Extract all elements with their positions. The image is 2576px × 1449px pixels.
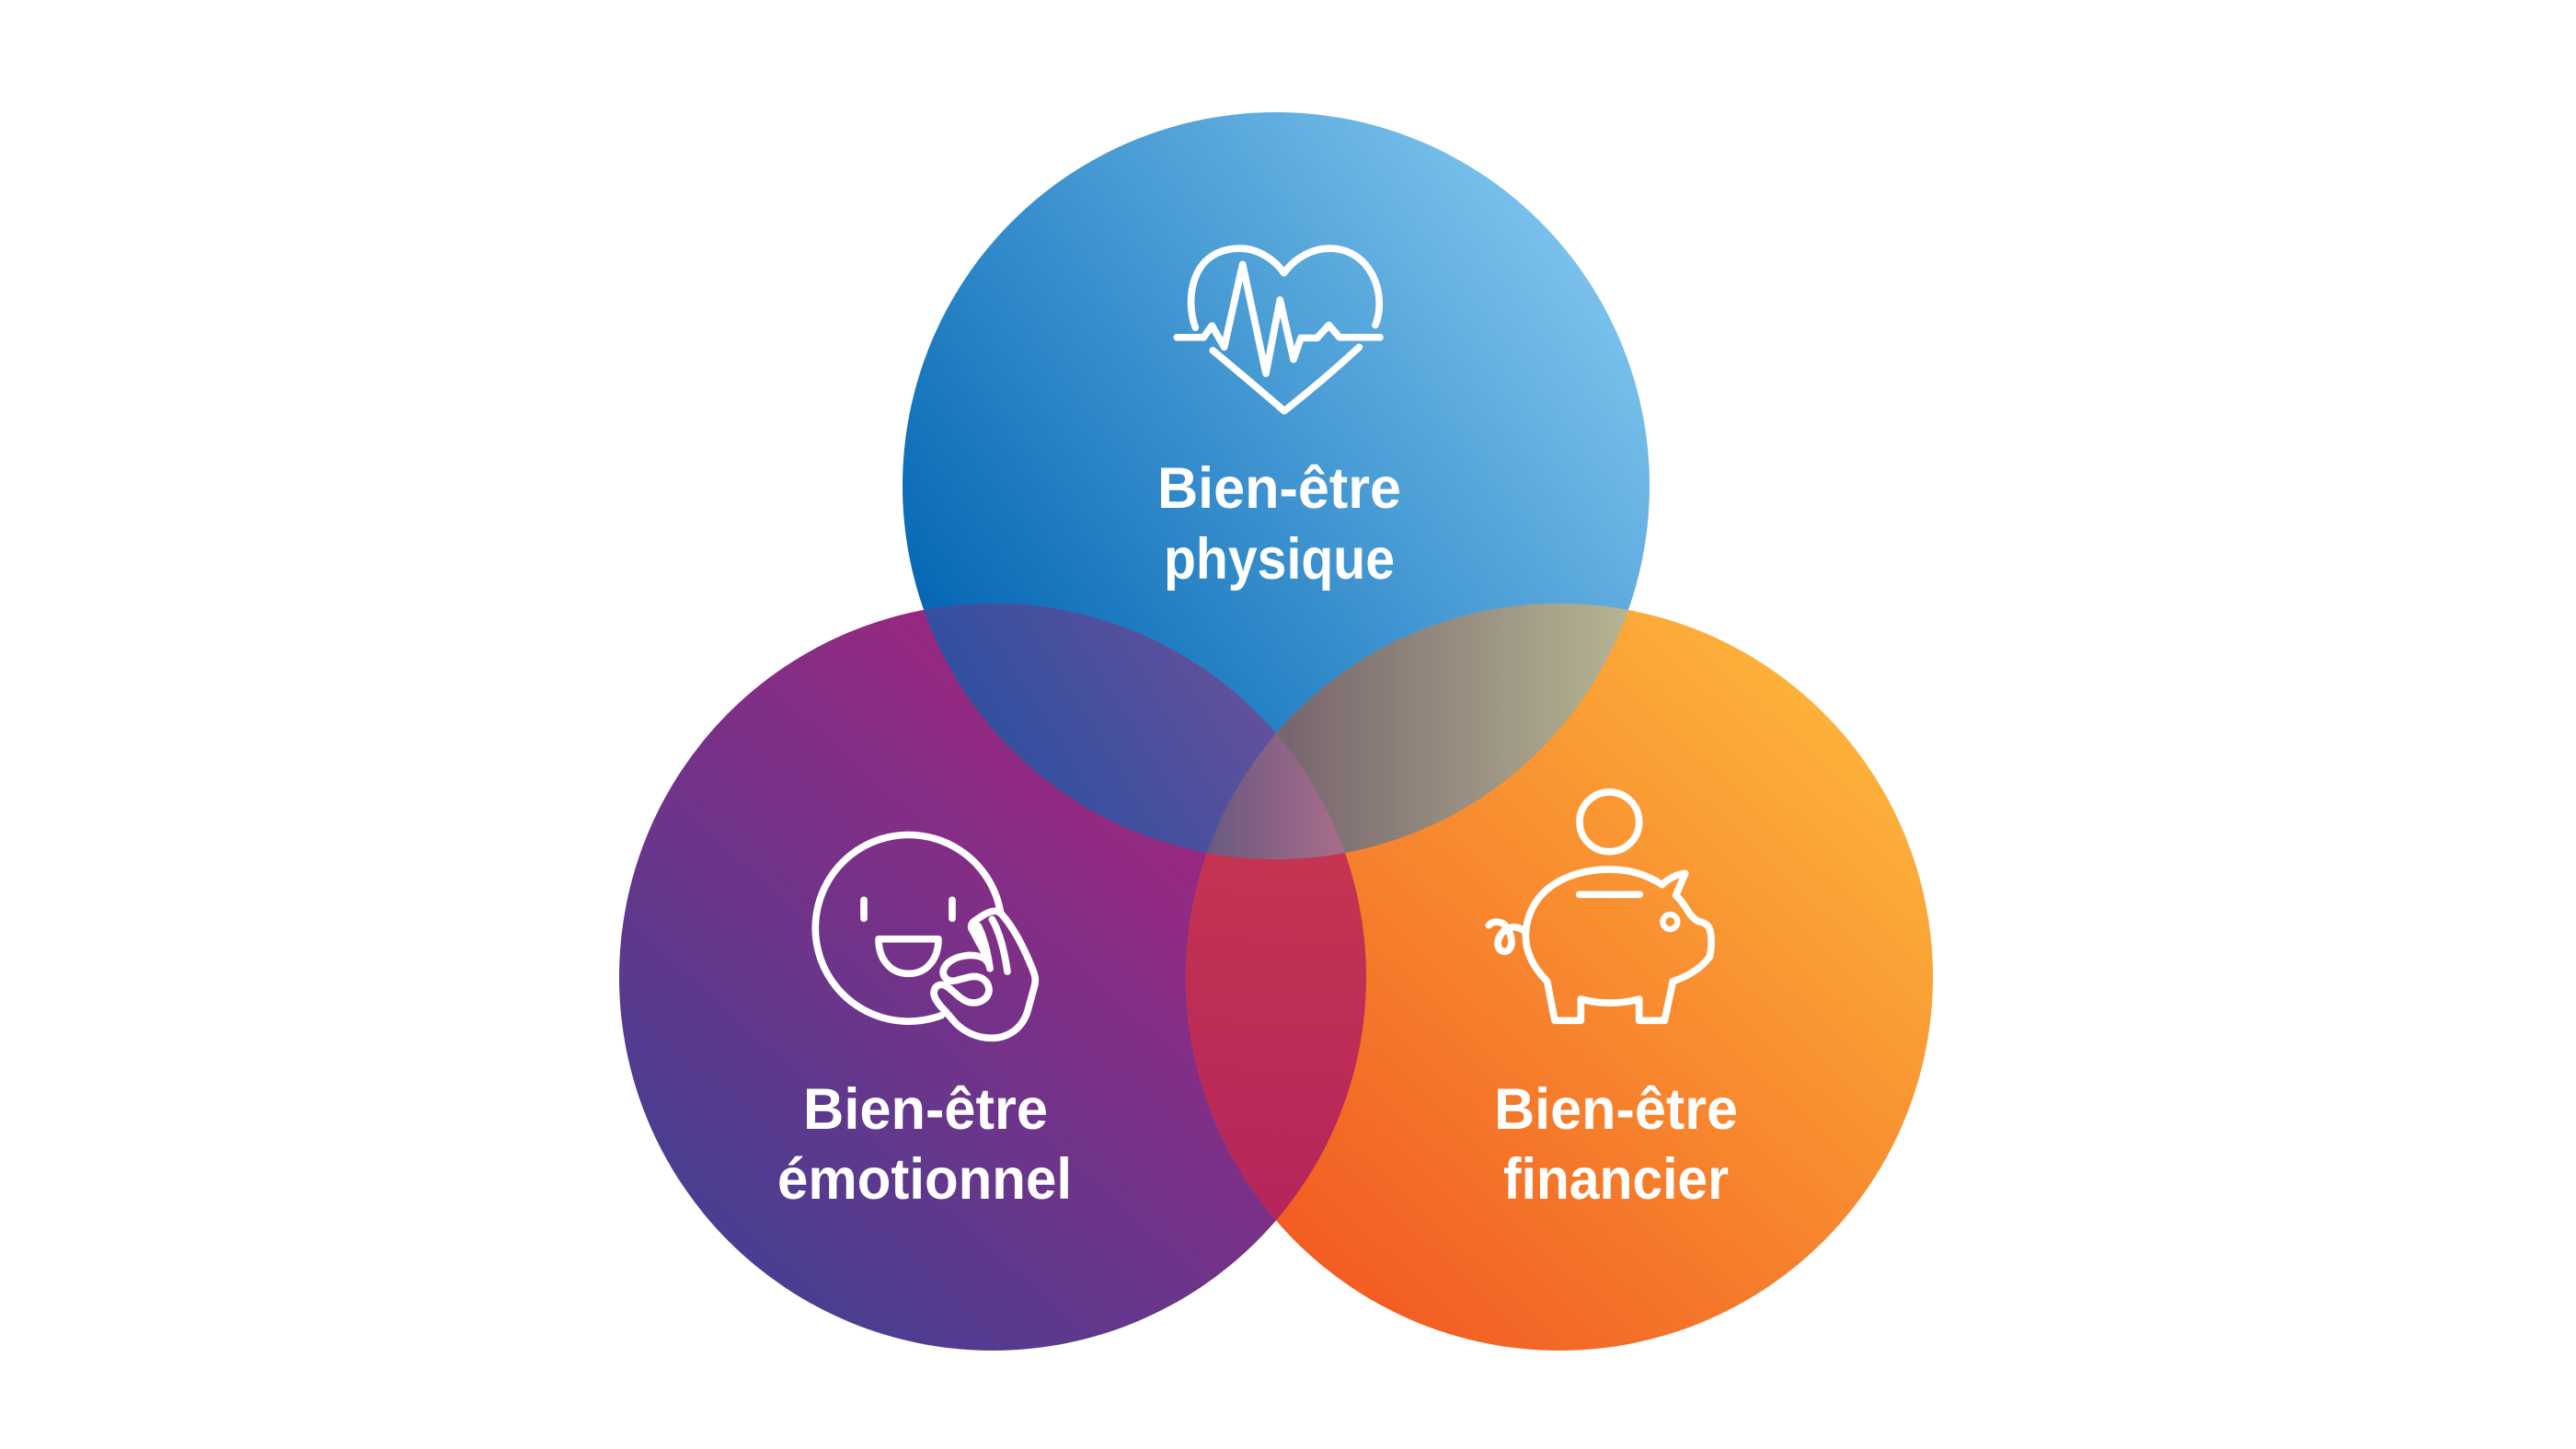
- overlap: emotional and financial: [1186, 853, 1366, 1220]
- heading: physical well-being: Bien-être: [1157, 456, 1401, 521]
- icon: heart with pulse line: [1177, 248, 1380, 411]
- icon: piggy bank with coin: [1489, 792, 1711, 1020]
- circle: emotional well-being: [619, 604, 1366, 1351]
- overlap: physical and emotional: [924, 604, 1345, 859]
- heading: emotional well-being: Bien-être: [803, 1077, 1048, 1142]
- icon: smiling face with OK hand: [815, 834, 1035, 1038]
- heading: physical well-being: physique: [1164, 527, 1395, 592]
- heading: financial well-being: Bien-être: [1494, 1077, 1738, 1142]
- circle: financial well-being: [1186, 604, 1933, 1351]
- overlap: centre of all three circles: [1207, 734, 1345, 859]
- heading: financial well-being: financier: [1503, 1147, 1729, 1212]
- venn diagram: three overlapping well-being circles: [619, 112, 1933, 1351]
- heading: emotional well-being: émotionnel: [777, 1147, 1072, 1212]
- circle: physical well-being: [903, 112, 1650, 859]
- overlap: physical and financial: [1207, 604, 1628, 859]
